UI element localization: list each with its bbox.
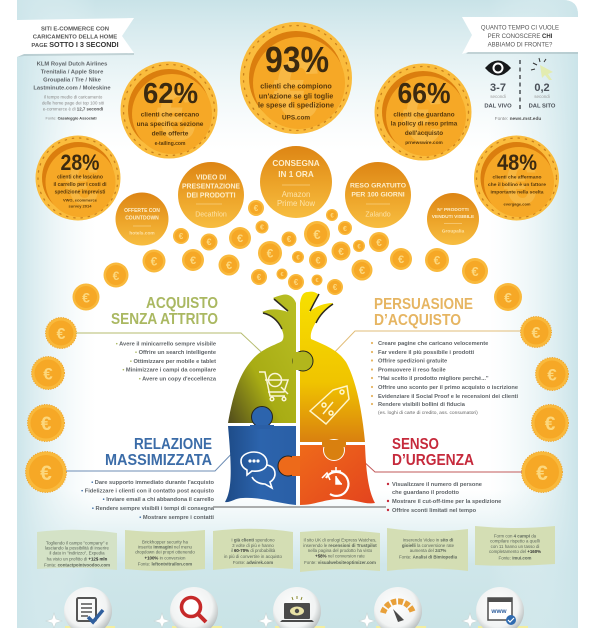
list: persuasione d'acquisto: (es. loghi di carte di credito, ass. consumatori) (378, 410, 478, 416)
coin: 48% (474, 136, 559, 220)
coin: 93%: € (272, 42, 320, 137)
circle: reso gratuito: Zalando (365, 212, 391, 218)
small coins falling into the bag: € (315, 278, 319, 284)
source: Fonte: news.mst.edu (495, 116, 541, 122)
piece: olive (228, 294, 296, 423)
circle: video di presentazione (178, 162, 244, 228)
list: relazione massimizzata: • Dare supporto immediato durante l'acquisto (91, 480, 215, 486)
card 5: Fonte: Analisi di Bimiopedia (399, 554, 458, 560)
text block: fast sites list (33, 62, 111, 120)
card 4: nella pagina del prodotto ha visto (308, 548, 373, 553)
text block: fast sites list: KLM Royal Dutch Airlines (37, 62, 107, 68)
coin: 93%: UPS.com (282, 114, 310, 122)
card 6: con 11 hanno un tasso di (491, 544, 539, 549)
stat: 0.2 seconds on site: secondi (534, 94, 550, 99)
circle: reso gratuito: RESO GRATUITO (350, 182, 406, 190)
coin: 62%: una specifica sezione (137, 121, 204, 128)
heading: persuasione d'acquisto: D’ACQUISTO (374, 312, 461, 329)
coin: 66%: dell'acquisto (405, 130, 443, 137)
circle: offerte con countdown: hotels.com (129, 230, 155, 236)
card 6: Form con 4 campi da (494, 534, 537, 538)
icon: price tag (310, 386, 349, 424)
coin: 93%: 93% (265, 39, 329, 80)
card 4 (300, 530, 380, 572)
list: relazione massimizzata: • Fidelizzare i clienti con il contatto post acquisto (81, 488, 215, 494)
small coins falling into the bag: € (294, 278, 299, 287)
card 3: I già clienti spendono (231, 538, 275, 542)
side coins right: € (545, 414, 556, 435)
list: persuasione d'acquisto: "Hai scelto il prodotto migliore perché..." (378, 376, 489, 382)
coin: 48%: clienti che affermano (493, 174, 541, 180)
text block: fast sites list: Groupalia / Tre / Nike (43, 78, 102, 84)
ribbon: home page load time: CARICAMENTO DELLA HOME (33, 34, 117, 40)
puzzle knobs (250, 351, 346, 476)
icon: magnifier (154, 587, 218, 628)
heading: senso d'urgenza: SENSO (392, 436, 439, 453)
card 1: Fonte: contactpointvoodoo.com (44, 562, 110, 568)
circle: offerte con countdown: OFFERTE CON (124, 208, 160, 214)
icon: laptop eye (258, 587, 321, 628)
list: persuasione d'acquisto: Promuovere il reso facile (378, 368, 446, 374)
card 1: lasciando la possibilità di inserire (45, 546, 110, 550)
coin: 62%: € (156, 76, 196, 156)
card 4: Fonte: visualwebsiteoptimizer.com (304, 560, 376, 565)
small coins falling into the bag: € (267, 246, 274, 260)
small coins falling into the bag: € (206, 237, 212, 247)
list: persuasione d'acquisto: Rendere visibili bollini di fiducia (378, 402, 466, 408)
circle: consegna in 1 ora (260, 146, 332, 218)
heading: persuasione d'acquisto: PERSUASIONE (374, 296, 473, 313)
card 1: il dato in "indirizzo", Expedia (49, 550, 105, 556)
circle: reso gratuito: PER 100 GIORNI (351, 192, 405, 198)
card 6: completamento del +160% (489, 549, 541, 554)
bag fold shadows (263, 294, 333, 329)
stat: 3-7 seconds live: secondi (490, 94, 506, 99)
card 2: +100% in conversion (145, 556, 186, 560)
ribbon: how long to know who is in front of us: ABBIAMO DI FRONTE? (488, 42, 553, 48)
small coins falling into the bag: € (179, 232, 184, 241)
list: relazione massimizzata: • Inviare email a chi abbandona il carrello (103, 497, 215, 503)
coin: 48%: evergage.com (504, 202, 531, 206)
list: persuasione d'acquisto: Creare pagine che caricano velocemente (378, 341, 488, 347)
coin: 66%: la policy di reso prima (391, 120, 458, 128)
circle: video di presentazione: DEI PRODOTTI (186, 192, 236, 200)
text block: fast sites list: Il tempo medio di caricamento (44, 94, 103, 100)
coin: 62%: 62% (143, 78, 198, 110)
card 3: Fonte: adwirek.com (233, 560, 273, 565)
circle: reso gratuito (345, 162, 411, 228)
circle: prodotti venduti visibile (427, 193, 479, 245)
note cards row (37, 526, 555, 572)
piece: blue (225, 426, 296, 505)
coin: 62% (120, 62, 218, 158)
list: acquisto senza attrito: • Minimizzare i campi da compilare (122, 368, 216, 374)
coin: 28%: 28% (60, 150, 100, 175)
icon: speed gauge (359, 587, 422, 628)
coin: 66% (374, 64, 472, 160)
card 3: il 60-70% di probabilità (231, 548, 276, 553)
stat: 3-7 seconds live (484, 82, 512, 110)
circle: offerte con countdown (116, 192, 168, 246)
coin: 48%: € (503, 150, 537, 217)
piece: orange (300, 445, 375, 505)
side coins right (494, 283, 568, 492)
small coins falling into the bag: € (330, 214, 334, 220)
small coins falling into the bag: € (471, 264, 479, 279)
coin: 28% (36, 136, 120, 220)
card 2: Brickhopper security ha (142, 540, 188, 544)
circle: video di presentazione: Decathlon (195, 212, 227, 218)
ribbon: home page load time: PAGE SOTTO I 3 SECONDI (31, 40, 119, 49)
divider (519, 60, 521, 109)
icon: cursor click (531, 58, 553, 80)
small coins falling into the bag: € (257, 273, 262, 282)
heading: acquisto senza attrito: SENZA ATTRITO (111, 311, 218, 328)
coin: 62%: e-tailing.com (155, 141, 186, 147)
circle: prodotti venduti visibile: Groupalia (442, 228, 465, 234)
coin: 28%: survey 2014 (69, 204, 92, 208)
stat: 0.2 seconds on site: 0,2 (534, 82, 550, 94)
coin: 66%: prnewswire.com (405, 140, 443, 146)
card 2 (125, 530, 205, 571)
side coins right: € (536, 462, 548, 485)
stat: 3-7 seconds live: DAL VIVO (484, 104, 512, 110)
card 1 (37, 530, 117, 570)
side coins left: € (41, 414, 52, 435)
small coins falling into the bag: € (280, 272, 284, 278)
ribbon: how long to know who is in front of us: QUANTO TEMPO CI VUOLE (481, 26, 559, 32)
small coins falling into the bag: € (287, 235, 292, 244)
small coins falling into the bag (104, 200, 488, 295)
small coins falling into the bag: € (260, 224, 264, 232)
list: senso d'urgenza: Mostrare il cut-off-time per la spedizione (392, 499, 501, 505)
icon: browser www (462, 587, 524, 628)
card 6: Fonte: imui.com (499, 556, 532, 560)
side coins left: € (82, 290, 90, 306)
card 4: inserendo le recensioni di Trustpilot (303, 543, 377, 548)
list: relazione massimizzata: • Mostrare sempre i contatti (139, 515, 214, 521)
small coins falling into the bag: € (296, 256, 300, 262)
list: persuasione d'acquisto: Offrire uno sconto per il primo acquisto o iscrizione (378, 385, 518, 391)
circle: offerte con countdown: COUNTDOWN (125, 216, 159, 222)
coin: 28%: il carrello per i costi di (53, 182, 107, 188)
circle: video di presentazione: VIDEO DI (196, 174, 226, 182)
small coins falling into the bag: € (359, 265, 365, 277)
small coins falling into the bag: € (151, 254, 158, 268)
icon: eye (485, 60, 511, 76)
icon: chat bubbles (241, 452, 275, 488)
coin: 93%: le spese di spedizione (258, 100, 334, 110)
icon: browser www: www (490, 608, 508, 615)
stat: 3-7 seconds live: 3-7 (490, 82, 506, 94)
list: acquisto senza attrito: • Avere il minicarrello sempre visibile (116, 342, 216, 348)
small coins falling into the bag: € (313, 227, 321, 242)
side coins left (26, 284, 100, 492)
small coins falling into the bag: € (398, 254, 404, 266)
coin: 93% (240, 22, 352, 137)
coin: 28%: VWO, ecommerce (63, 198, 98, 202)
coin: 93%: un'azione se gli toglie (259, 92, 333, 100)
small coins falling into the bag: € (113, 269, 120, 283)
side coins left: € (43, 364, 53, 384)
card 2: inserito immagini nel menu (138, 544, 193, 550)
heading: persuasione d'acquisto (374, 296, 473, 329)
card 2: dropdown dei propri ottenendo (135, 550, 195, 554)
card 3 (213, 529, 293, 570)
coin: 93%: clienti che compiono (260, 82, 332, 90)
side coins right: € (504, 290, 512, 306)
list: relazione massimizzata: • Rendere sempre visibili i tempi di consegna (92, 506, 215, 512)
ribbon: home page load time (17, 18, 134, 57)
coin: 48%: che il bollino è un fattore (488, 182, 546, 188)
card 5: Inserendo Video in sito di (403, 538, 453, 542)
icon: stopwatch (322, 467, 348, 496)
piece: yellow (300, 292, 365, 442)
circle: video di presentazione: PRESENTAZIONE (182, 184, 240, 190)
stat: 0.2 seconds on site (529, 82, 556, 110)
coin: 48%: importante nella scelta (490, 190, 544, 196)
circle: consegna in 1 ora: CONSEGNA (272, 159, 320, 168)
list: senso d'urgenza (387, 482, 501, 514)
list: acquisto senza attrito (116, 342, 217, 382)
card 1: Togliendo il campo "company" e (46, 540, 109, 546)
list: acquisto senza attrito: • Offrire un search intelligente (135, 350, 216, 356)
coin: 28%: spedizione imprevisti (55, 190, 106, 196)
icon: cart (259, 372, 288, 401)
text block: fast sites list: delle home page dei top 100 siti (42, 100, 104, 106)
list: persuasione d'acquisto: Evidenziare il Social Proof e le recensioni dei clienti (378, 394, 518, 400)
heading: senso d'urgenza: D’URGENZA (392, 452, 474, 469)
heading: acquisto senza attrito (111, 295, 218, 328)
small coins falling into the bag: € (190, 255, 196, 267)
side coins left: € (40, 462, 52, 485)
ribbon: how long to know who is in front of us (462, 17, 578, 54)
ribbon: home page load time: SITI E-COMMERCE CON (41, 26, 109, 32)
small coins falling into the bag: € (333, 283, 338, 292)
small coins falling into the bag: € (237, 233, 243, 245)
card 4: +58% nel conversion rate (315, 554, 365, 558)
card 5: aumenta del 247% (410, 548, 446, 553)
heading: senso d'urgenza (392, 436, 474, 469)
card 6 (475, 526, 555, 566)
circle: consegna in 1 ora: Prime Now (277, 199, 315, 208)
card 2: Fonte: leftontvitrailon.com (138, 562, 192, 566)
coin: 66%: € (402, 78, 442, 158)
text block: fast sites list: Trenitalia / Apple Store (41, 70, 104, 76)
text block: fast sites list: Fonte: Casaleggio Associati (45, 116, 97, 120)
small coins falling into the bag: € (315, 256, 321, 266)
card 6: compilare rispetto a quelli (490, 538, 540, 544)
heading: relazione massimizzata (105, 436, 212, 469)
icon: document check (46, 587, 112, 628)
card 3: in più di convertire in acquisto (224, 554, 282, 559)
small coins falling into the bag: € (343, 226, 347, 233)
bottom yellow tabs (65, 626, 528, 628)
circle: consegna in 1 ora: IN 1 ORA (278, 170, 314, 179)
list: senso d'urgenza: Visualizzare il numero di persone (392, 482, 482, 488)
list: acquisto senza attrito: • Avere un copy d'eccellenza (139, 376, 217, 382)
connector lines (66, 331, 522, 472)
text block: fast sites list: Lastminute.com / Moleskine (33, 86, 111, 92)
circle: prodotti venduti visibile: N° PRODOTTI (437, 207, 469, 213)
card 1: ha visto un profitto di +12$ mln (47, 556, 108, 562)
coin: 48%: 48% (497, 150, 537, 175)
list: senso d'urgenza: Offrire sconti limitati nel tempo (392, 508, 477, 514)
small coins falling into the bag: € (254, 204, 259, 213)
coin: 62%: clienti che cercano (141, 112, 199, 118)
heading: relazione massimizzata: MASSIMIZZATA (105, 452, 212, 469)
card 5 (387, 528, 468, 571)
list: persuasione d'acquisto: Offrire spedizioni gratuite (378, 358, 447, 364)
coin: 66%: clienti che guardano (393, 112, 455, 118)
card 4: Il sito UK di orologi Express Watches, (303, 538, 377, 542)
small coins falling into the bag: € (226, 260, 232, 272)
side coins left: € (57, 326, 66, 343)
text block: fast sites list: e-commerce è di 12,7 secondi (43, 106, 103, 112)
money bag puzzle (213, 292, 386, 507)
list: persuasione d'acquisto: Far vedere il più possibile i prodotti (378, 350, 474, 356)
card 5: gioielli la conversione rate (402, 543, 455, 548)
list: acquisto senza attrito: • Ottimizzare per mobile e tablet (130, 359, 216, 365)
list: senso d'urgenza: che guardano il prodotto (392, 490, 460, 496)
stat: 0.2 seconds on site: DAL SITO (529, 104, 556, 110)
small coins falling into the bag: € (434, 254, 441, 268)
heading: acquisto senza attrito: ACQUISTO (146, 295, 218, 312)
heading: relazione massimizzata: RELAZIONE (134, 436, 212, 453)
coin: 62%: delle offerte (152, 130, 189, 138)
card 3: 3 volte di più e hanno (232, 543, 274, 548)
list: relazione massimizzata (81, 480, 215, 521)
small coins falling into the bag: € (338, 247, 344, 258)
ribbon: how long to know who is in front of us: PER CONOSCERE CHI (488, 34, 553, 40)
side coins right: € (532, 325, 541, 342)
coin: 28%: clienti che lasciano (57, 174, 103, 180)
circle: prodotti venduti visibile: VENDUTI VISIBILE (432, 214, 475, 220)
coin: 28%: € (65, 150, 99, 217)
circle: consegna in 1 ora: Amazon (282, 190, 310, 199)
small coins falling into the bag: € (357, 244, 361, 250)
coin: 66%: 66% (398, 78, 451, 110)
small coins falling into the bag: € (376, 238, 382, 249)
side coins right: € (547, 366, 557, 384)
list: persuasione d'acquisto (371, 341, 518, 416)
